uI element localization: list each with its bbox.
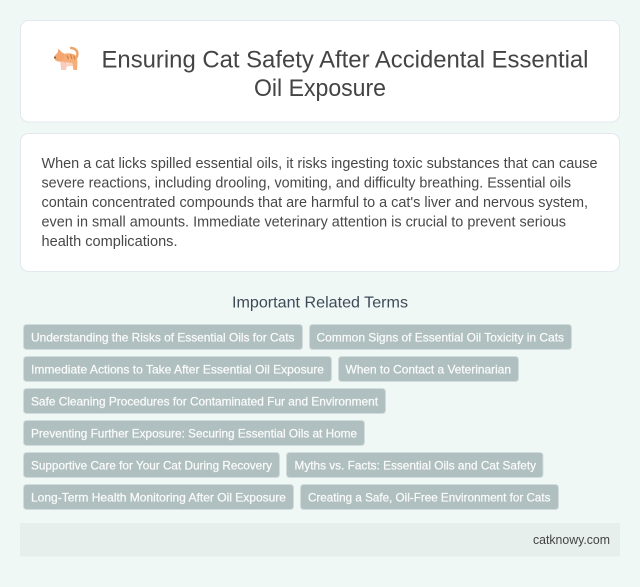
- description text: even in small amounts. Immediate veterinary attention is crucial to prevent serious: [42, 214, 566, 230]
- heading: related terms: Important Related Terms: [232, 294, 408, 312]
- tag: common signs: Common Signs of Essential Oil Toxicity in Cats: [316, 330, 564, 344]
- footer source text: catknowy.com: [533, 533, 610, 547]
- tag: myths vs facts: [286, 452, 543, 478]
- description text: contain concentrated compounds that are harmful to a cat's liver and nervous system,: [42, 194, 588, 211]
- tag: understanding the risks: [24, 324, 302, 350]
- panel: footer: [20, 523, 620, 556]
- tag: understanding the risks: Understanding the Risks of Essential Oils for Cats: [31, 330, 294, 344]
- tag: immediate actions: Immediate Actions to Take After Essential Oil Exposure: [31, 362, 324, 376]
- tag: safe cleaning: [24, 388, 386, 414]
- tag: when to contact: When to Contact a Veterinarian: [346, 362, 511, 376]
- tag: oil-free environment: [300, 484, 558, 510]
- tag: long-term monitoring: Long-Term Health Monitoring After Oil Exposure: [31, 490, 286, 504]
- tag: preventing further exposure: Preventing Further Exposure: Securing Essential Oils at Home: [31, 426, 357, 440]
- tag: safe cleaning: Safe Cleaning Procedures for Contaminated Fur and Environment: [31, 394, 379, 408]
- description text: health complications.: [42, 233, 178, 250]
- tag: when to contact: [338, 356, 518, 382]
- tag: common signs: [310, 324, 572, 350]
- panel: description card: [20, 134, 620, 272]
- panel: title card: [20, 20, 620, 122]
- panel: term tags: [24, 324, 572, 510]
- title text: Oil Exposure: [254, 75, 386, 102]
- icon: orange cat: [54, 48, 77, 70]
- tag: oil-free environment: Creating a Safe, Oil-Free Environment for Cats: [308, 490, 550, 504]
- tag: long-term monitoring: [24, 484, 294, 510]
- tag: myths vs facts: Myths vs. Facts: Essential Oils and Cat Safety: [294, 458, 536, 472]
- tag: immediate actions: [24, 356, 332, 382]
- tag: supportive care: Supportive Care for Your Cat During Recovery: [31, 458, 272, 472]
- tag: supportive care: [24, 452, 280, 478]
- title text: Ensuring Cat Safety After Accidental Essential: [102, 46, 588, 74]
- description text: severe reactions, including drooling, vomiting, and difficulty breathing. Essential oils: [42, 174, 571, 192]
- description text: When a cat licks spilled essential oils, it risks ingesting toxic substances that can cause: [42, 155, 598, 172]
- tag: preventing further exposure: [24, 420, 364, 446]
